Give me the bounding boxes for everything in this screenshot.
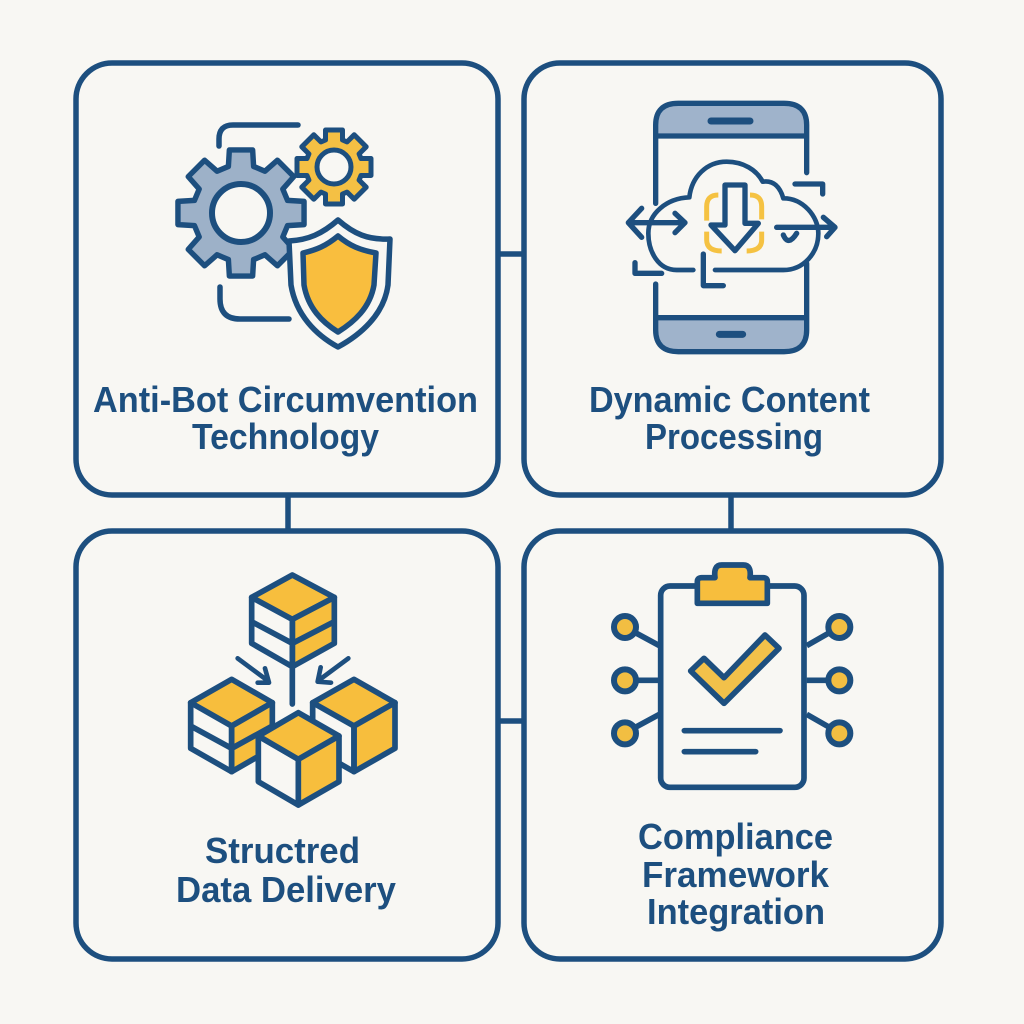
- heading: anti-bot circumvention technology: [93, 379, 478, 457]
- panel: anti-bot circumvention: [76, 63, 498, 495]
- heading: structred data delivery: [176, 830, 396, 910]
- panel: dynamic content processing: [524, 63, 941, 495]
- icon: data cubes: [191, 575, 395, 805]
- panel: compliance framework integration: [524, 531, 941, 959]
- heading: compliance framework integration: Compliance: [638, 816, 833, 857]
- heading: dynamic content processing: Dynamic Content: [589, 379, 870, 420]
- heading: dynamic content processing: [589, 379, 870, 457]
- heading: anti-bot circumvention technology: Anti-Bot Circumvention: [93, 379, 478, 420]
- icon: clipboard with nodes: [614, 565, 850, 787]
- heading: structred data delivery: Data Delivery: [176, 869, 396, 910]
- heading: compliance framework integration: [638, 816, 833, 932]
- heading: compliance framework integration: Integration: [647, 891, 825, 932]
- heading: dynamic content processing: Processing: [645, 416, 823, 457]
- heading: anti-bot circumvention technology: Technology: [192, 416, 379, 457]
- connectors between panels: [288, 254, 731, 721]
- panel: structured data delivery: [76, 531, 498, 959]
- icon: gears and shield: [178, 125, 390, 347]
- icon: phone and cloud: [628, 103, 835, 352]
- heading: compliance framework integration: Framework: [642, 854, 830, 895]
- heading: structred data delivery: Structred: [205, 830, 360, 871]
